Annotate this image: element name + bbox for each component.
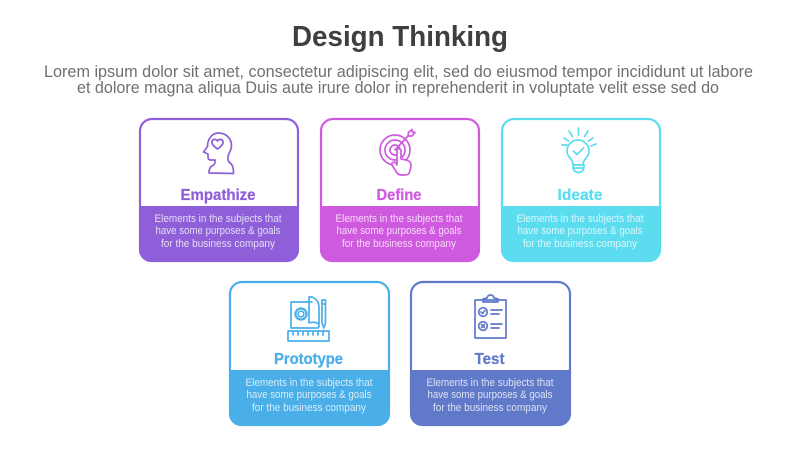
body text	[154, 213, 282, 250]
body text: have some purposes & goals	[156, 225, 281, 237]
body text: Elements in the subjects that	[154, 213, 282, 225]
panel: Empathize	[139, 119, 299, 262]
icon: light bulb with check	[562, 128, 596, 173]
body text	[426, 377, 554, 414]
icon: head with heart	[204, 133, 234, 174]
icon: blueprint, gear, ruler and pencil	[288, 297, 329, 341]
body text	[336, 213, 462, 250]
body text: for the business company	[523, 238, 637, 250]
body text: have some purposes & goals	[428, 389, 553, 401]
body text: Elements in the subjects that	[336, 213, 462, 225]
icon: clipboard checklist	[475, 295, 506, 338]
panel: Test	[410, 282, 571, 426]
panel: Prototype	[229, 282, 390, 426]
subtitle text: et dolore magna aliqua Duis aute irure dolor in reprehenderit in voluptate velit esse sed do	[77, 79, 719, 97]
body text: Elements in the subjects that	[516, 213, 644, 225]
panel: Define	[320, 119, 480, 262]
heading: Prototype	[274, 351, 343, 368]
heading: Define	[376, 187, 422, 204]
body text: have some purposes & goals	[518, 225, 643, 237]
heading: Ideate	[558, 187, 603, 204]
body text: for the business company	[161, 238, 275, 250]
body text: have some purposes & goals	[246, 389, 372, 401]
body text: for the business company	[433, 402, 547, 414]
body text: Elements in the subjects that	[426, 377, 554, 389]
body text: for the business company	[342, 238, 456, 250]
body text	[516, 213, 644, 250]
panel: Ideate	[501, 119, 661, 262]
heading: Empathize	[180, 187, 256, 204]
body text: have some purposes & goals	[336, 225, 462, 237]
body text: Elements in the subjects that	[246, 377, 372, 389]
icon: target with arrow and hand	[380, 130, 415, 175]
heading: Test	[474, 351, 504, 368]
subtitle text	[44, 63, 753, 97]
body text: for the business company	[252, 402, 366, 414]
body text	[246, 377, 372, 414]
subtitle text: Lorem ipsum dolor sit amet, consectetur adipiscing elit, sed do eiusmod tempor incididunt ut labore	[44, 63, 753, 81]
title: Design Thinking	[292, 21, 508, 53]
